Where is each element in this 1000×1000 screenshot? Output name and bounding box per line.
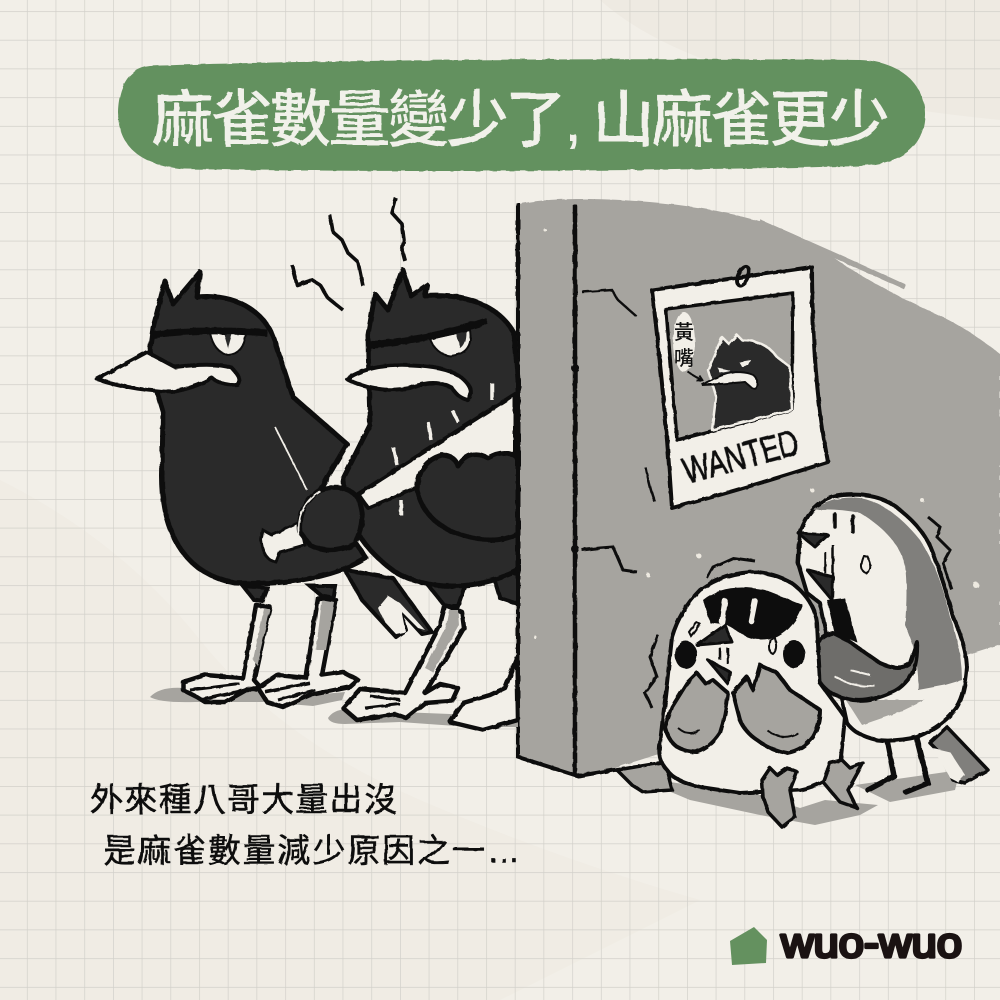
logo wordmark: wuo-wuo <box>780 919 962 966</box>
front sparrow: cheeks <box>675 641 697 669</box>
front sparrow: tremble lines <box>645 558 755 708</box>
right sparrow: wing <box>813 633 917 700</box>
wanted poster <box>652 265 828 508</box>
front sparrow: black mask <box>703 588 803 640</box>
poster label text: 黃 <box>674 321 694 344</box>
first myna: wing fist <box>300 487 362 550</box>
second myna: tail <box>490 565 518 604</box>
second myna: eye <box>430 330 471 356</box>
poster photo frame <box>666 293 793 440</box>
title banner: 麻雀數量變少了, 山麻雀更少 <box>152 86 890 155</box>
second myna: wing fist <box>417 453 518 540</box>
logo icon: green house <box>730 927 767 965</box>
mountain sparrow (right, comforting) <box>798 495 988 792</box>
second myna: body and head <box>343 270 518 586</box>
front sparrow: right hand <box>733 665 820 753</box>
front sparrow: body <box>659 572 845 793</box>
right sparrow: tail <box>930 727 988 783</box>
poster word: wanted: WANTED <box>678 422 803 492</box>
first myna: body and head <box>150 272 366 583</box>
first myna (holding a bone) <box>97 272 432 707</box>
title banner <box>118 59 925 171</box>
caption text: 是麻雀數量減少原因之一… <box>103 832 520 869</box>
caption text: 外來種八哥大量出沒 <box>90 781 397 818</box>
poster speech label bubble <box>673 312 695 372</box>
right sparrow: tremble lines <box>928 517 952 590</box>
right sparrow: grey back <box>813 498 962 690</box>
second myna: far foot <box>450 657 518 730</box>
right sparrow: belly shade <box>846 700 925 725</box>
caption text <box>90 781 520 869</box>
wall with cast shadow <box>516 199 1000 778</box>
right sparrow: body <box>798 495 967 741</box>
front sparrow: feet <box>762 768 797 827</box>
right sparrow: black throat <box>827 598 857 642</box>
right sparrow: open beak <box>798 533 833 600</box>
first myna: bone <box>261 522 305 562</box>
second myna: beak <box>347 365 471 400</box>
first myna: beak <box>97 352 240 392</box>
logo <box>730 919 962 966</box>
poster bird portrait <box>708 335 792 430</box>
front sparrow: tears <box>689 622 776 654</box>
poster arrow <box>688 372 703 381</box>
poster pin <box>734 265 752 287</box>
front sparrow: left hand <box>665 673 728 752</box>
stress squiggles above the myna <box>292 198 405 310</box>
front sparrow: open beak <box>697 625 732 684</box>
first myna: eye <box>210 333 246 355</box>
right sparrow: legs <box>868 740 928 792</box>
first myna: legs and claws <box>183 605 270 702</box>
second myna (angry, with scarf) <box>343 270 518 730</box>
second myna: leg and claws <box>343 605 464 720</box>
wanted poster: 嘴 <box>674 347 694 370</box>
poster sheet <box>652 267 828 508</box>
sparrow (front, scared, hands on face) <box>617 558 863 827</box>
poster bird beak <box>702 372 757 388</box>
ground shadows under the birds <box>150 688 960 825</box>
first myna: tail <box>345 570 432 637</box>
front sparrow: tail stub <box>617 762 672 792</box>
right sparrow: eyes and tear <box>835 514 853 532</box>
second myna: scarf <box>358 394 515 508</box>
